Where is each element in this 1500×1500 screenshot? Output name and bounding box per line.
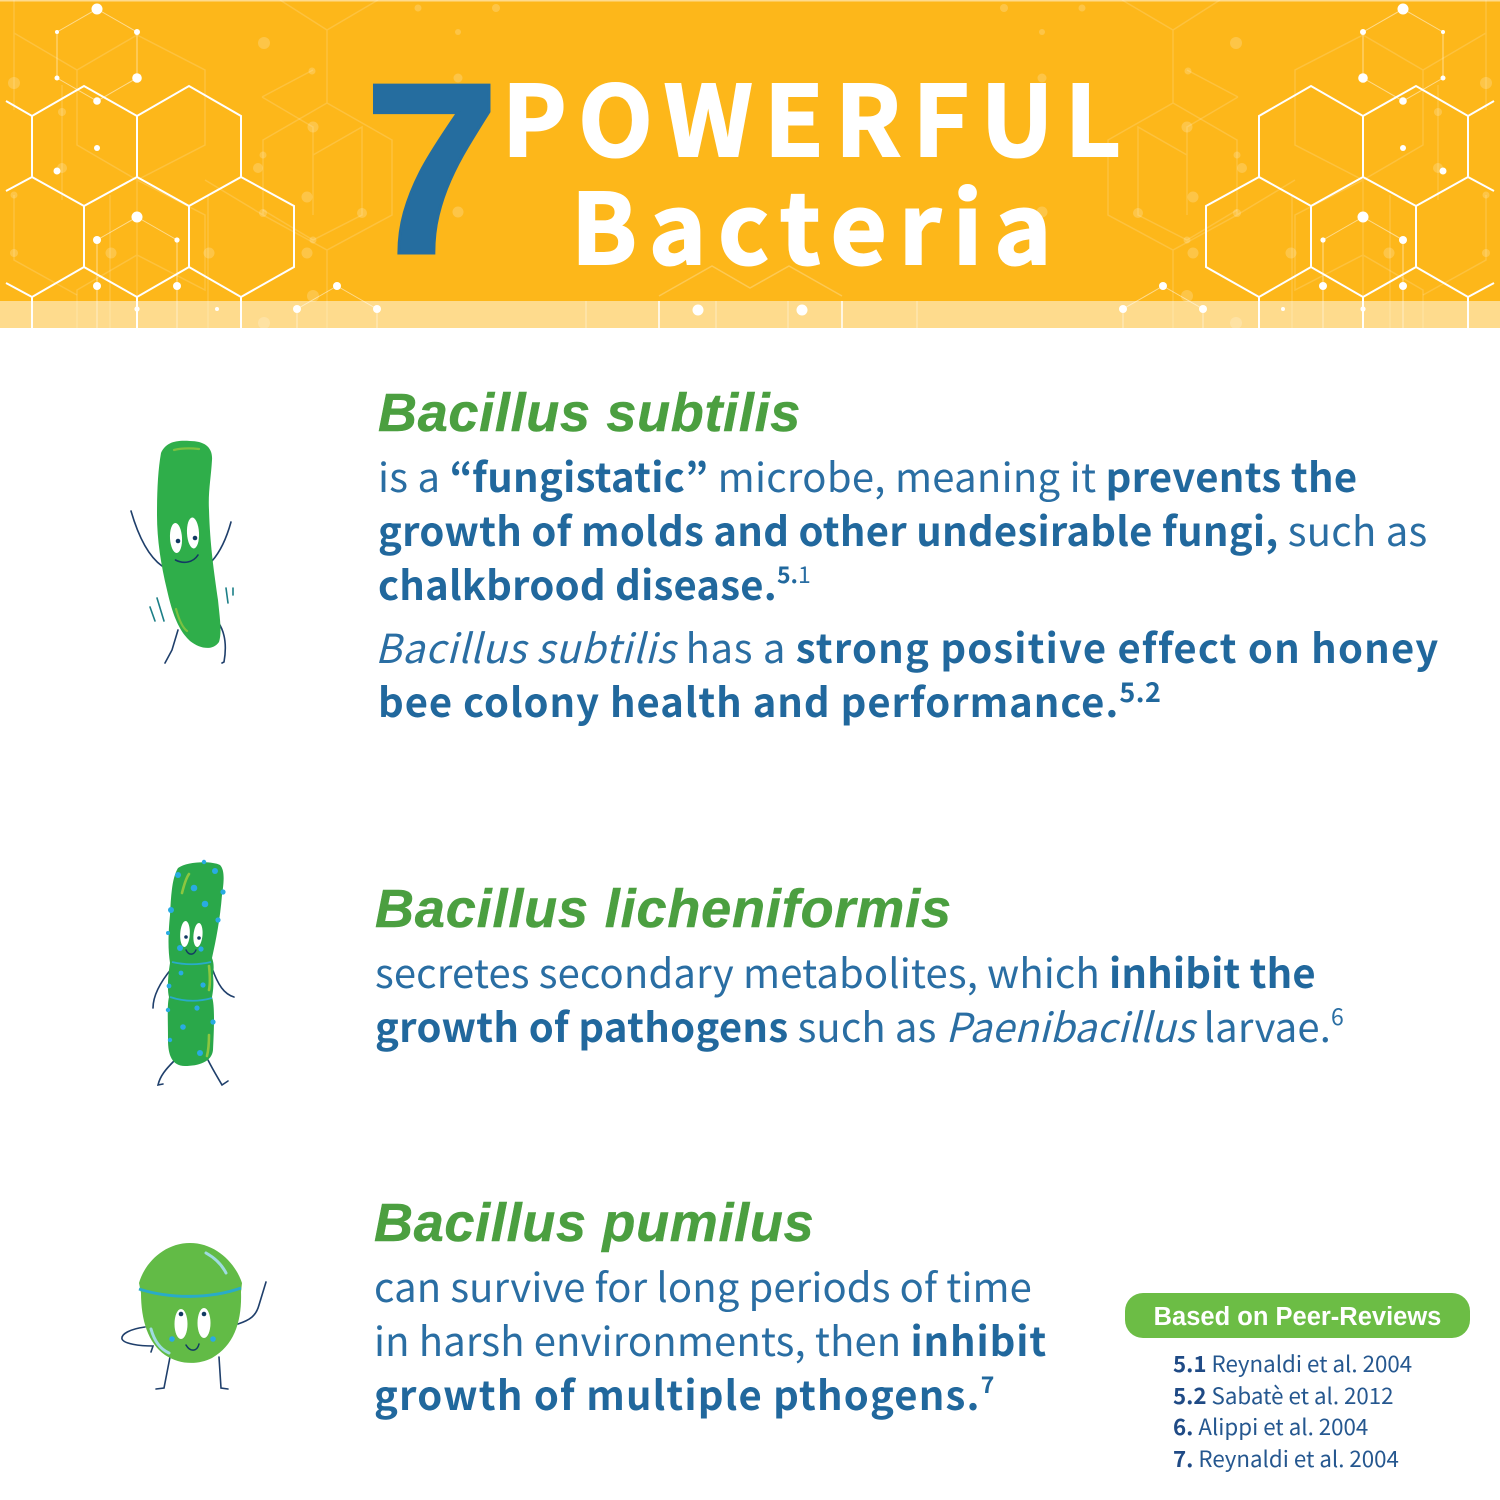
heading: Bacillus subtilis: Bacillus subtilis bbox=[378, 383, 801, 443]
title: POWERFUL: POWERFUL bbox=[502, 43, 1132, 184]
references badge bbox=[1125, 1293, 1470, 1338]
references list: 7. Reynaldi et al. 2004 bbox=[1173, 1442, 1399, 1474]
icon: Bacillus subtilis character bbox=[130, 440, 234, 664]
text block: Bacillus subtilis bbox=[375, 383, 1439, 729]
paragraph: harsh environments: in harsh environments, then inhibit bbox=[374, 1310, 1047, 1368]
icon: Bacillus pumilus character bbox=[121, 1243, 267, 1390]
references list: 5.2 Sabatè et al. 2012 bbox=[1173, 1378, 1394, 1410]
title numeral 7: 7 bbox=[364, 32, 500, 305]
paragraph: fungistatic: growth of molds and other undesirable fungi, such as bbox=[378, 500, 1427, 558]
icon: Bacillus licheniformis character bbox=[152, 860, 235, 1086]
paragraph: harsh environments: can survive for long periods of time bbox=[374, 1256, 1032, 1314]
paragraph: harsh environments: growth of multiple pthogens.7 bbox=[374, 1364, 994, 1422]
paragraph: colony health bbox=[375, 617, 1439, 729]
paragraph: harsh environments bbox=[374, 1256, 1047, 1422]
paragraph: fungistatic bbox=[378, 446, 1427, 612]
heading: Bacillus licheniformis: Bacillus licheniformis bbox=[375, 879, 952, 939]
header banner bbox=[0, 0, 1500, 328]
paragraph: metabolites: growth of pathogens such as Paenibacillus larvae.6 bbox=[375, 996, 1344, 1054]
paragraph: colony health: Bacillus subtilis has a strong positive effect on honey bbox=[375, 617, 1439, 675]
hexagon network background bbox=[0, 0, 1500, 328]
references list: 6. Alippi et al. 2004 bbox=[1173, 1410, 1368, 1442]
text block: Bacillus pumilus bbox=[374, 1193, 1047, 1422]
references list: 5.1 Reynaldi et al. 2004 bbox=[1173, 1347, 1412, 1379]
paragraph: colony health: bee colony health and performance.5.2 bbox=[378, 671, 1161, 729]
title: Bacteria: Bacteria bbox=[571, 151, 1063, 292]
text block: Bacillus licheniformis bbox=[375, 879, 1344, 1054]
heading: Bacillus pumilus: Bacillus pumilus bbox=[374, 1193, 814, 1253]
paragraph: fungistatic: is a “fungistatic” microbe, meaning it prevents the bbox=[378, 446, 1357, 504]
references badge: Based on Peer-Reviews bbox=[1154, 1303, 1441, 1331]
paragraph: metabolites bbox=[375, 942, 1344, 1054]
paragraph: metabolites: secretes secondary metabolites, which inhibit the bbox=[375, 942, 1316, 1000]
paragraph: fungistatic: chalkbrood disease.5.1 bbox=[378, 554, 811, 612]
references list bbox=[1173, 1347, 1412, 1474]
